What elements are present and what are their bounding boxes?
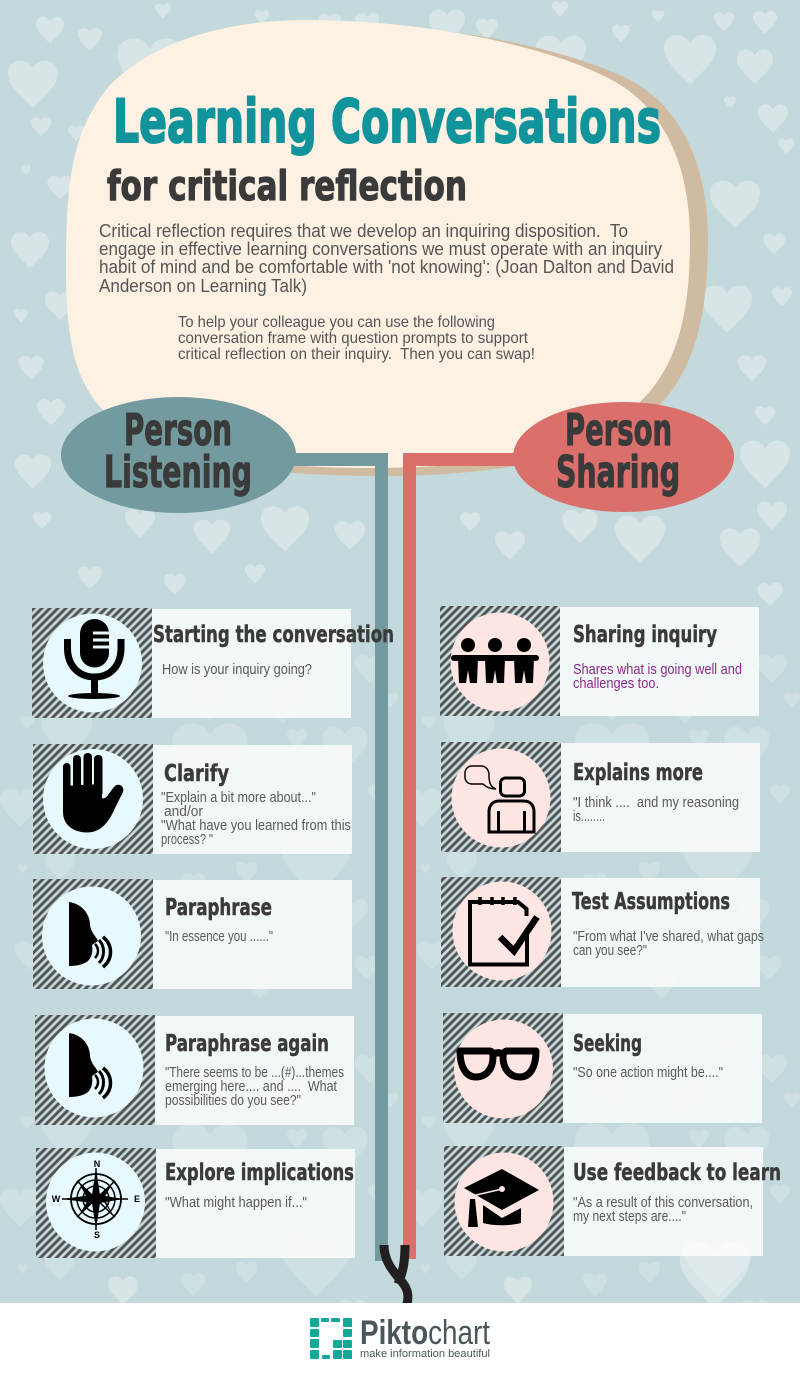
- prompt: "Explain a bit more about...": [161, 790, 316, 806]
- prompt: and/or: [164, 804, 203, 820]
- prompt: [573, 795, 739, 825]
- heading: Clarify: [164, 761, 229, 787]
- footer: [0, 1303, 800, 1376]
- prompt: process? ": [161, 832, 213, 848]
- logo wordmark: Piktochart: [360, 1314, 490, 1352]
- heading: Paraphrase: [165, 895, 272, 921]
- icon: compass: W: [52, 1194, 61, 1204]
- card: use feedback to learn: [444, 1146, 781, 1256]
- person sharing badge: [513, 402, 734, 512]
- icon: person with speech bubble: [465, 766, 534, 832]
- card: paraphrase: [33, 879, 352, 989]
- icon: piktochart logo: [310, 1318, 352, 1359]
- icon: raised hand: [63, 753, 123, 832]
- prompt: How is your inquiry going?: [162, 662, 312, 678]
- header blob: [66, 20, 690, 468]
- prompt: "In essence you ......": [165, 929, 273, 945]
- prompt: can you see?": [573, 943, 647, 959]
- connector: sharing line: [410, 460, 520, 1259]
- subtitle: for critical reflection: [107, 162, 467, 210]
- intro paragraph: habit of mind and be comfortable with 'not knowing': (Joan Dalton and David: [99, 257, 674, 277]
- prompt: [161, 790, 351, 848]
- heading: Explains more: [573, 760, 703, 786]
- person sharing badge: Sharing: [556, 447, 680, 498]
- icon: checklist: [470, 897, 537, 964]
- prompt: "So one action might be....": [573, 1065, 723, 1081]
- card: seeking: [443, 1013, 762, 1123]
- card: paraphrase again: [35, 1015, 354, 1125]
- prompt: my next steps are....": [573, 1209, 686, 1225]
- intro paragraph: [99, 221, 674, 296]
- card: explore implications: [36, 1148, 355, 1258]
- prompt: "There seems to be ...(#)...themes: [165, 1065, 344, 1081]
- card: starting the conversation: [32, 608, 394, 718]
- icon: graduation cap: [464, 1169, 539, 1227]
- heading: Starting the conversation: [153, 622, 394, 648]
- intro paragraph: Critical reflection requires that we develop an inquiring disposition. To: [99, 221, 628, 241]
- icon: microphone: [68, 619, 121, 699]
- prompt: Shares what is going well and: [573, 662, 742, 678]
- prompt: "I think .... and my reasoning: [573, 795, 739, 811]
- instructions paragraph: critical reflection on their inquiry. Then you can swap!: [178, 346, 535, 363]
- person listening badge: Listening: [104, 447, 252, 498]
- icon: speaking profile: [69, 902, 110, 967]
- instructions paragraph: conversation frame with question prompts to support: [178, 330, 529, 347]
- person listening badge: [61, 397, 296, 513]
- connector: listening line: [290, 460, 382, 1261]
- header blob shadow: [80, 24, 708, 476]
- heading: Test Assumptions: [572, 889, 730, 915]
- prompt: [573, 1195, 753, 1225]
- heading: Seeking: [573, 1031, 642, 1057]
- card: test assumptions: [441, 877, 764, 987]
- heading: Paraphrase again: [165, 1031, 329, 1057]
- prompt: is........: [573, 809, 605, 825]
- instructions paragraph: [178, 314, 535, 363]
- card: sharing inquiry: [440, 606, 759, 716]
- prompt: [573, 662, 742, 692]
- icon: compass: [52, 1159, 140, 1240]
- person sharing badge: Person: [565, 405, 672, 456]
- prompt: "What have you learned from this: [161, 818, 351, 834]
- icon: glasses: [460, 1051, 536, 1077]
- prompt: "As a result of this conversation,: [573, 1195, 753, 1211]
- icon: y-shaped cable join: [384, 1245, 408, 1304]
- instructions paragraph: To help your colleague you can use the following: [178, 314, 495, 331]
- heading: Sharing inquiry: [573, 622, 717, 648]
- prompt: challenges too.: [573, 676, 659, 692]
- icon: compass: E: [134, 1194, 140, 1204]
- icon: compass: N: [94, 1159, 100, 1169]
- card: explains more: [441, 742, 760, 852]
- prompt: "What might happen if...": [165, 1195, 307, 1211]
- prompt: emerging here.... and .... What: [165, 1079, 337, 1095]
- logo tagline: make information beautiful: [360, 1348, 490, 1360]
- icon: speaking profile: [69, 1033, 110, 1098]
- person listening badge: Person: [124, 405, 232, 456]
- heading: Explore implications: [165, 1160, 354, 1186]
- card: clarify: [33, 744, 352, 854]
- prompt: "From what I've shared, what gaps: [573, 929, 764, 945]
- prompt: [165, 1065, 344, 1109]
- intro paragraph: Anderson on Learning Talk): [99, 276, 307, 296]
- icon: compass: S: [94, 1230, 100, 1240]
- prompt: [573, 929, 764, 959]
- prompt: possibilities do you see?": [165, 1093, 301, 1109]
- icon: three people: [451, 638, 539, 683]
- intro paragraph: engage in effective learning conversations we must operate with an inquiry: [99, 239, 662, 259]
